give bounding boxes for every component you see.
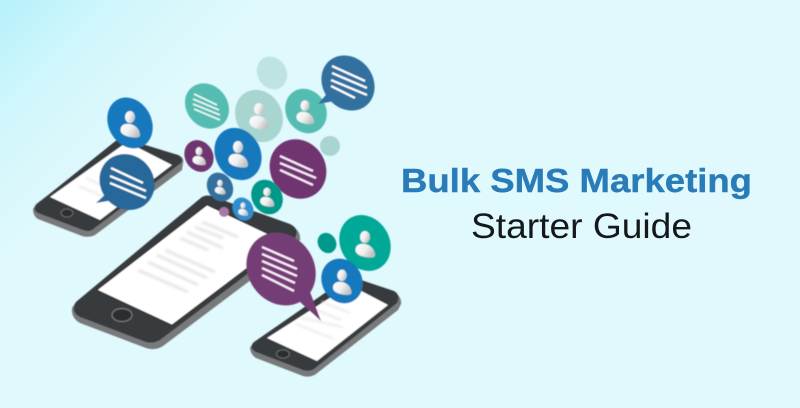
bubble: purple message with tail bbox=[232, 219, 330, 321]
bubble: purple message bbox=[259, 129, 337, 209]
bubble: light blue person bbox=[228, 194, 258, 224]
bubble: blue person top left bbox=[99, 90, 161, 156]
bubble: pale person bbox=[226, 81, 292, 151]
bubble: steel small person bbox=[202, 168, 238, 206]
phone: top left bbox=[33, 138, 183, 237]
bubble: blue person bottom bbox=[314, 251, 370, 311]
bubble: purple small person bbox=[179, 135, 219, 177]
bubble: teal person large bbox=[329, 206, 401, 280]
bubble: teal message bbox=[176, 74, 238, 138]
bubble: small purple dot bbox=[219, 207, 229, 217]
phone: large centre bbox=[72, 196, 300, 349]
title: Bulk SMS Marketing bbox=[401, 162, 752, 199]
illustration group bbox=[33, 45, 401, 377]
bubble: steel message with tail bbox=[88, 143, 166, 221]
subtitle: Starter Guide bbox=[471, 207, 692, 246]
bubble: teal dot bbox=[314, 229, 340, 257]
bubble: blue person bbox=[205, 120, 271, 188]
bubble: teal person bbox=[277, 81, 335, 141]
phone: bottom right bbox=[250, 278, 401, 377]
bubble: pale top bbox=[251, 51, 293, 95]
bubble: dark teal person bbox=[245, 174, 289, 220]
bubble: pale small dot bbox=[320, 136, 340, 156]
bubble: dark blue message with tail bbox=[310, 45, 386, 121]
